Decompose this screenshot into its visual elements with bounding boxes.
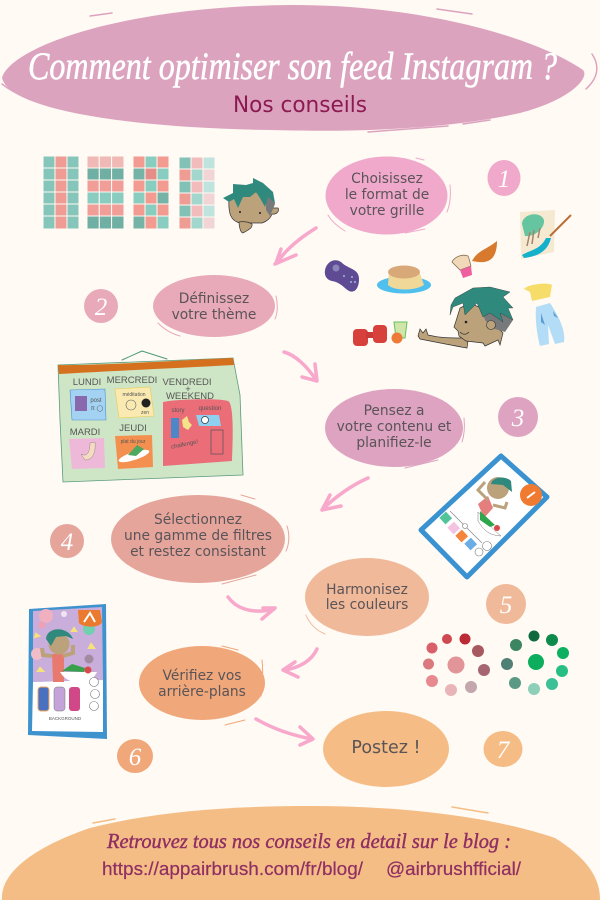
blog link: https://appairbrush.com/fr/blog/ (102, 859, 363, 879)
tuesday card (69, 438, 105, 469)
number 4 (50, 524, 84, 558)
phone: background check (28, 604, 107, 739)
phone: filters app (421, 456, 547, 577)
grid 3 (133, 156, 169, 229)
phone: background check: BACKGROUND (49, 716, 82, 721)
icon: flan on plate (377, 266, 431, 294)
step 4 bubble: Sélectionnez (154, 512, 242, 528)
icon: lips (472, 241, 497, 262)
icon: dumbbell (353, 325, 387, 346)
step 6 bubble: arrière-plans (158, 684, 246, 700)
calendar board (58, 351, 243, 482)
number 2 (84, 289, 118, 323)
subheading: Nos conseils (233, 93, 367, 118)
footer banner (2, 806, 600, 900)
colour dots: greens (501, 630, 569, 695)
step 7 bubble: Postez ! (351, 738, 421, 758)
step 6 bubble (139, 646, 265, 725)
wednesday card: méditation (122, 392, 146, 398)
thursday card (115, 435, 153, 469)
monday card (70, 389, 106, 420)
calendar board: WEEKEND (166, 391, 214, 402)
number 5 (486, 584, 526, 624)
step 1 bubble (326, 156, 450, 234)
step 3 bubble: planifiez-le (356, 435, 432, 451)
calendar board: + (185, 384, 191, 395)
icon: jeans (536, 303, 564, 346)
step 4 bubble: et restez consistant (130, 544, 267, 560)
monday card: post (90, 398, 102, 404)
arrow 5 (283, 649, 317, 677)
icon: yellow top (524, 284, 552, 301)
calendar board: JEUDI (119, 423, 147, 434)
calendar board: MARDI (70, 427, 100, 438)
step 1 bubble: votre grille (350, 203, 424, 219)
number 6: 6 (129, 744, 142, 771)
step 3 bubble: votre contenu et (337, 419, 452, 435)
calendar board: LUNDI (73, 377, 101, 388)
step 4 bubble (111, 495, 289, 584)
title banner (2, 5, 597, 132)
step 4 bubble: une gamme de filtres (124, 528, 272, 544)
step 1 bubble: Choisissez (351, 171, 423, 187)
grid 1 (43, 156, 79, 229)
step 3 bubble: Pensez a (364, 403, 424, 419)
step 1 bubble: le format de (345, 187, 429, 203)
number 3 (498, 397, 538, 437)
wednesday card: zen (141, 410, 149, 416)
weekend card: challenge! (171, 439, 199, 451)
icon: painting (520, 210, 571, 259)
step 2 bubble (153, 275, 277, 337)
colour dots: reds (423, 634, 490, 696)
number 2: 2 (95, 294, 107, 321)
number 5: 5 (500, 592, 512, 619)
social handle: @airbrushfficial/ (386, 859, 521, 879)
arrow 4 (228, 597, 275, 619)
grid examples (43, 156, 215, 229)
number 3: 3 (511, 405, 524, 432)
icon: boy reaching (418, 287, 513, 348)
step 2 bubble: votre thème (172, 307, 256, 323)
calendar board: MERCREDI (107, 375, 157, 386)
number 1: 1 (498, 166, 510, 193)
weekend card (163, 399, 233, 466)
weekend card: question (199, 406, 221, 412)
monday card: π ◯ (91, 405, 104, 412)
icon: game controller (325, 260, 359, 292)
step 7 bubble (323, 711, 449, 787)
number 6 (117, 739, 153, 773)
wednesday card (115, 387, 154, 418)
step 2 bubble: Définissez (179, 291, 249, 307)
number 4: 4 (61, 529, 73, 556)
step 6 bubble: Vérifiez vos (163, 668, 241, 684)
icon: makeup brush (452, 255, 472, 278)
thursday card: plat du jour (121, 439, 146, 445)
footer heading: Retrouvez tous nos conseils en detail sur le blog : (106, 829, 511, 853)
calendar board: VENDREDI (162, 377, 212, 388)
arrow 3 (322, 478, 368, 510)
step 5 bubble (305, 558, 429, 636)
weekend card: story (171, 408, 185, 414)
step 5 bubble: les couleurs (326, 597, 408, 613)
number 7: 7 (497, 737, 511, 764)
number 7 (484, 731, 522, 767)
icon: juice and fruit (392, 322, 407, 344)
icon: thinking boy (223, 178, 279, 233)
step 5 bubble: Harmonisez (326, 582, 408, 598)
arrow 2 (284, 352, 317, 381)
grid 2 (87, 156, 124, 229)
arrow 6 (256, 719, 313, 745)
arrow 1 (275, 228, 316, 264)
step 3 bubble (325, 389, 464, 468)
grid 4 (179, 157, 215, 229)
number 1 (488, 160, 520, 196)
